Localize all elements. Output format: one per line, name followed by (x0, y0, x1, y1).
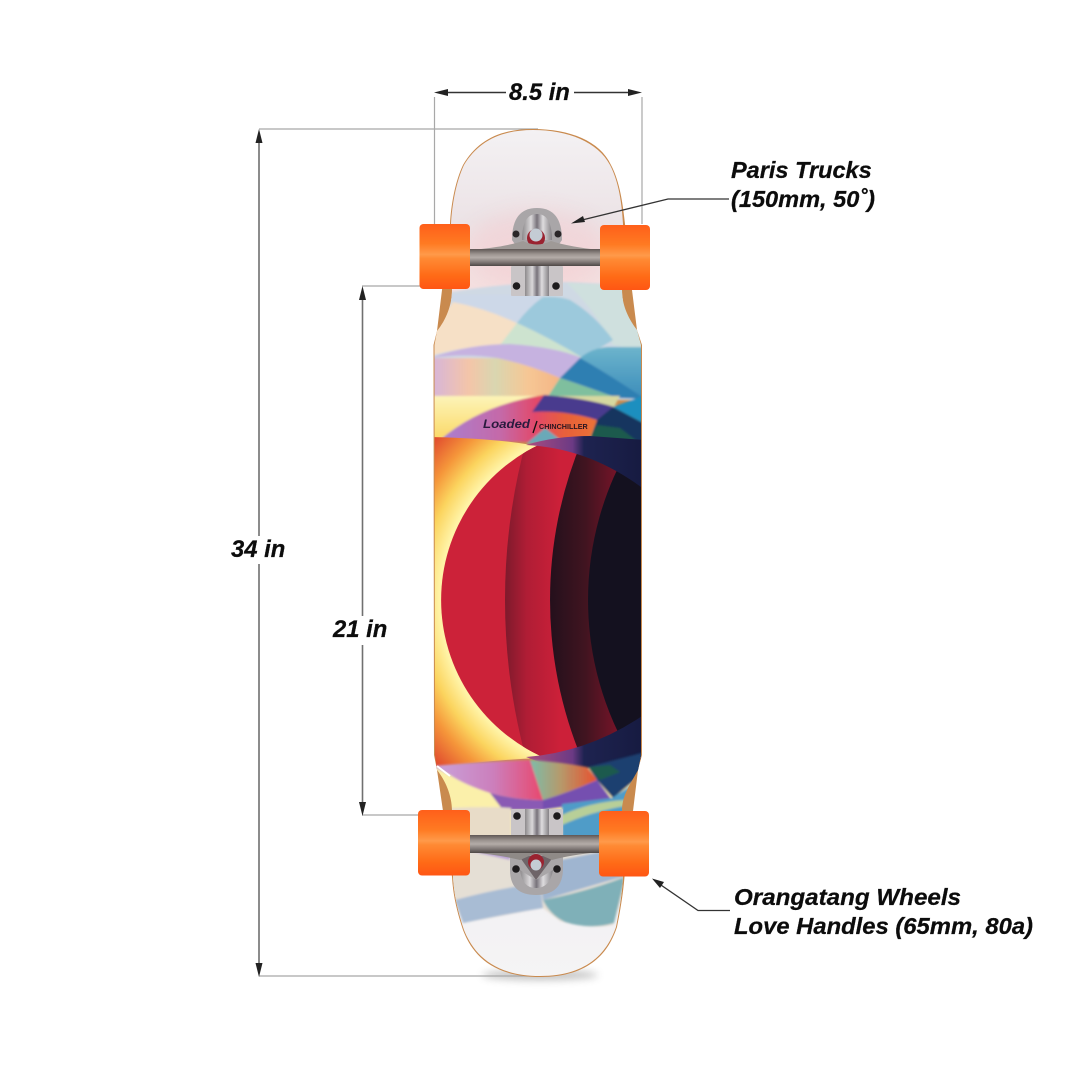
truck pink shadow (473, 214, 600, 280)
top lower block (511, 266, 563, 296)
top truck (470, 208, 601, 296)
crimson circle (441, 446, 540, 756)
callout: Orangatang Wheels: Love Handles (65mm, 80a) (734, 913, 1033, 939)
bottom white tail (453, 878, 623, 976)
white sliver (437, 766, 450, 776)
bottom baseplate (510, 853, 563, 895)
top wheels (420, 224, 650, 290)
board shadow (482, 970, 598, 980)
dimension: 34 in height: 34 in (231, 536, 285, 563)
top axle (470, 249, 601, 266)
dimension: 8.5 in width (434, 79, 642, 224)
near black crescent (588, 471, 641, 760)
callout: Orangatang Wheels (652, 878, 1033, 939)
upper pastel arcs (430, 282, 645, 455)
logo: Loaded (483, 417, 531, 431)
bottom hanger (470, 852, 600, 860)
lower pastel arcs (430, 752, 645, 927)
top baseplate (512, 208, 562, 250)
top white nose (451, 130, 623, 300)
warm halo band (434, 437, 540, 766)
dimension: 8.5 in width: 8.5 in (509, 79, 570, 106)
deck graphic (430, 125, 660, 980)
longboard (434, 129, 642, 977)
bottom wheels (418, 810, 649, 876)
dimension: 21 in wheelbase: 21 in (332, 616, 387, 643)
callout: Paris Trucks: (150mm, 50˚) (731, 186, 875, 212)
callout: Orangatang Wheels: Orangatang Wheels (734, 884, 961, 910)
logo: CHINCHILLER (539, 422, 589, 431)
dimension: 34 in height (231, 129, 538, 977)
dark wine crescent (550, 454, 641, 760)
dark red crescent (505, 446, 550, 756)
bottom kingpin nut (528, 854, 544, 870)
logo (483, 417, 589, 433)
top hanger (470, 241, 600, 265)
bottom upper block (511, 809, 563, 836)
top kingpin nut (527, 229, 545, 247)
upper overlap arc (526, 436, 645, 490)
bottom truck (468, 809, 601, 895)
crescent layers (505, 446, 641, 760)
callout: Paris Trucks (571, 157, 875, 224)
dimension: 21 in wheelbase (332, 286, 510, 816)
wood deck edge (434, 129, 642, 977)
callout: Paris Trucks: Paris Trucks (731, 157, 872, 183)
lower overlap arc (526, 714, 645, 772)
bottom axle (468, 835, 601, 853)
